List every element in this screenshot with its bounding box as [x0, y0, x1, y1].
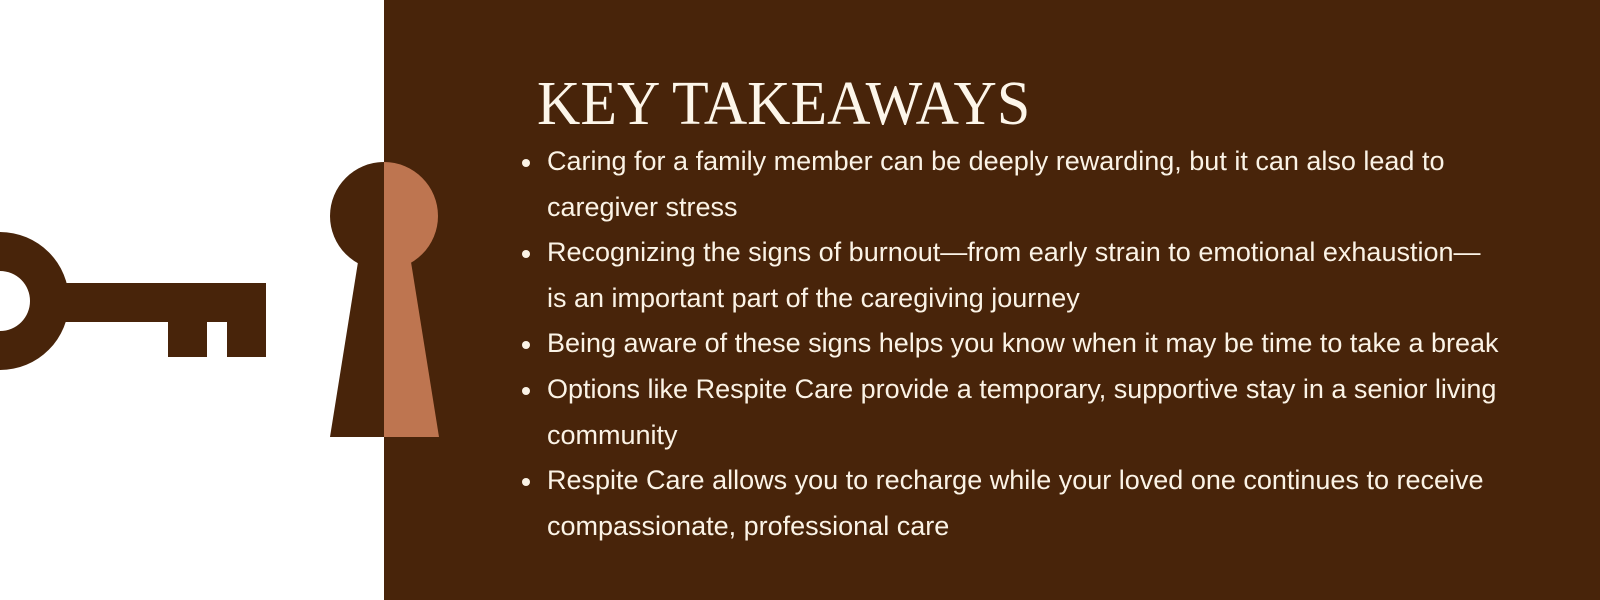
panel: brown background: [384, 0, 1600, 600]
bullet list: Options like Respite Care provide a temporary, supportive stay in a senior living community: [547, 374, 1496, 450]
bullet list: is an important part of the caregiving journey: [547, 283, 1080, 313]
icon: keyhole: [330, 162, 439, 437]
bullet list: [522, 146, 1499, 541]
bullet list: Recognizing the signs of burnout—from early strain to emotional exhaustion—: [547, 237, 1480, 267]
title: KEY TAKEAWAYS: [537, 69, 1030, 138]
bullet list: Caring for a family member can be deeply rewarding, but it can also lead to caregiver stress: [547, 146, 1444, 222]
bullet list: Being aware of these signs helps you know when it may be time to take a break: [547, 328, 1499, 358]
bullet list: Respite Care allows you to recharge while your loved one continues to receive compassionate, professional care: [547, 465, 1484, 541]
icon: key: [0, 232, 266, 370]
